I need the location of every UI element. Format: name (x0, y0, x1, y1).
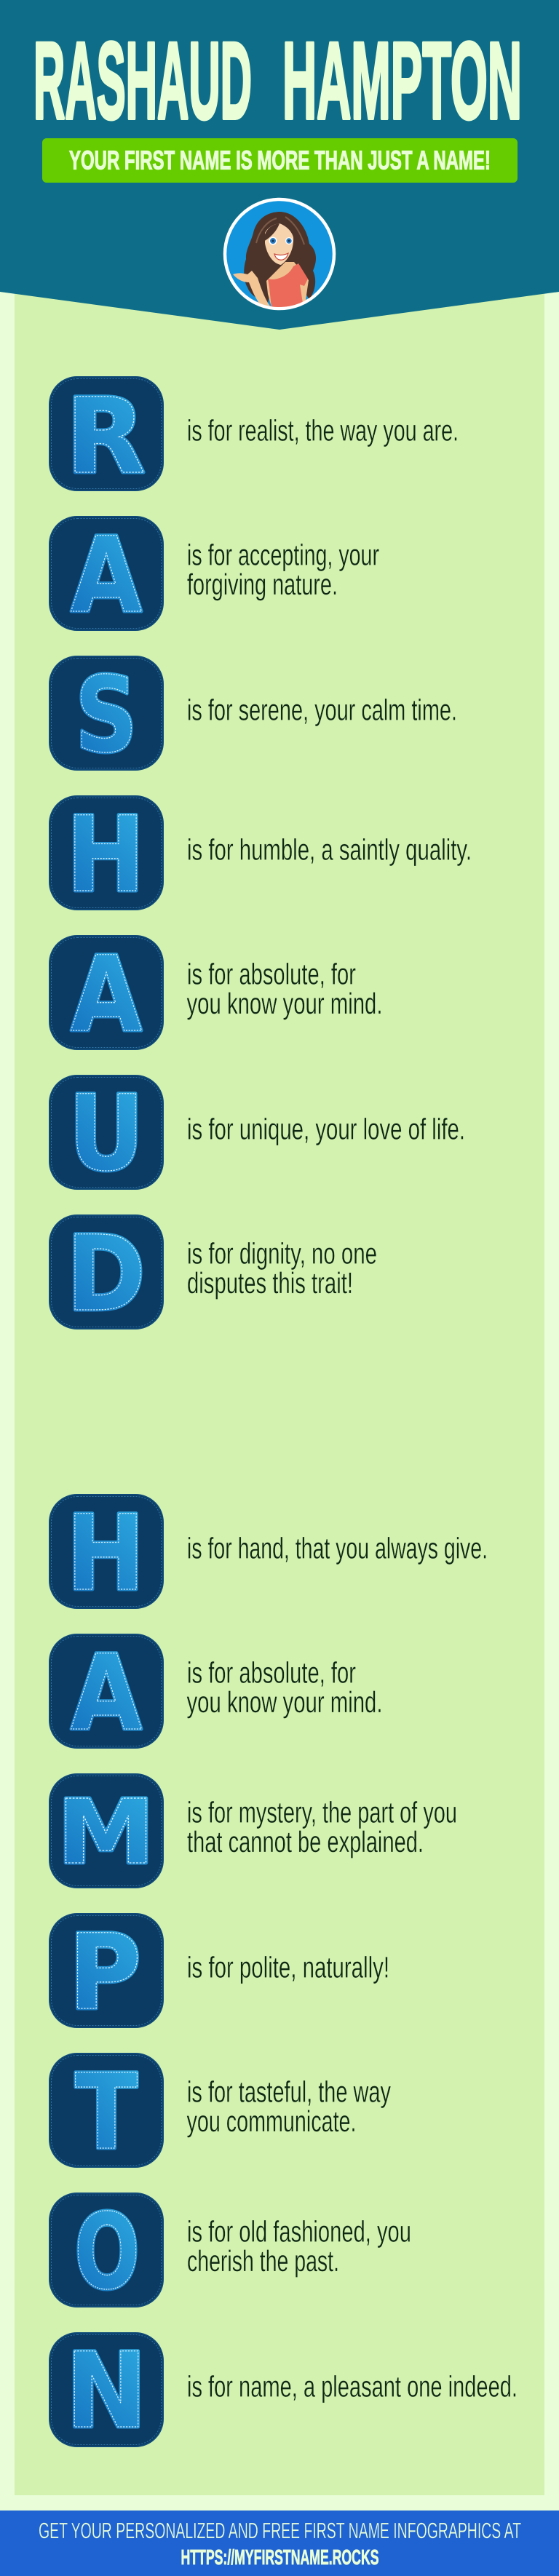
tile: letter N: N (66, 2330, 147, 2452)
text: A meaning (186, 1656, 383, 1719)
text: T meaning (186, 2075, 391, 2138)
text: M meaning: that cannot be explained. (187, 1825, 424, 1859)
tile: letter H: H (66, 1492, 145, 1614)
tile: letter A: A (71, 1632, 142, 1754)
text: D meaning: disputes this trait! (187, 1266, 353, 1300)
row: U (49, 1073, 465, 1194)
text: A meaning: is for absolute, for (187, 1656, 356, 1690)
tile: letter T: T (75, 2051, 138, 2173)
tile: letter U: U (68, 1073, 144, 1194)
text: O meaning: is for old fashioned, you (187, 2215, 411, 2249)
tile: letter H: H (66, 794, 145, 915)
row: R (49, 375, 459, 497)
text: T meaning: you communicate. (186, 2104, 357, 2138)
tile: letter A: A (71, 514, 142, 636)
tile: letter T (49, 2051, 163, 2173)
row: M (49, 1774, 457, 1888)
text: T meaning: is for tasteful, the way (187, 2075, 391, 2109)
text: A meaning (187, 538, 379, 601)
tile: letter P (49, 1912, 163, 2033)
tile: letter A: A (71, 514, 142, 636)
tile: letter P: P (68, 1912, 141, 2033)
tile: letter M: M (57, 1781, 155, 1884)
text: A meaning: is for absolute, for (187, 958, 356, 991)
footer URL: HTTPS://MYFIRSTNAME.ROCKS (181, 2546, 378, 2569)
row: A (49, 1632, 383, 1754)
tile: letter S (49, 654, 163, 776)
text: A meaning: forgiving nature. (187, 568, 338, 601)
text: D meaning: is for dignity, no one (187, 1237, 377, 1271)
text: A meaning: you know your mind. (186, 987, 383, 1020)
text: A meaning (186, 958, 383, 1020)
row: H (49, 1492, 488, 1614)
text: A meaning: you know your mind. (186, 1685, 383, 1719)
text: M meaning: is for mystery, the part of you (187, 1796, 457, 1829)
text: D meaning (187, 1237, 377, 1300)
text: O meaning: cherish the past. (187, 2244, 339, 2278)
tile: letter S: S (75, 654, 138, 776)
icon: woman avatar in circle (225, 199, 334, 310)
tile: letter D: D (66, 1213, 146, 1335)
row: A (49, 934, 383, 1055)
text: O meaning (187, 2215, 411, 2278)
tile: letter H: H (66, 1492, 145, 1614)
footer (0, 2511, 559, 2576)
tile: letter M: M (57, 1781, 155, 1884)
row: T (49, 2051, 391, 2173)
tile: letter S: S (75, 654, 138, 776)
row: O (49, 2191, 411, 2313)
tile: letter H: H (66, 794, 145, 915)
tile: letter O: O (74, 2191, 140, 2313)
row: P (49, 1912, 389, 2033)
tile: letter R: R (66, 375, 146, 497)
text: S meaning: is for serene, your calm time. (187, 693, 457, 726)
subtitle bar (42, 138, 518, 183)
row: N (49, 2330, 518, 2452)
tile: letter P: P (68, 1912, 141, 2033)
tile: letter N: N (66, 2330, 147, 2452)
tile: letter U: U (68, 1073, 144, 1194)
tile: letter T: T (75, 2051, 138, 2173)
header banner (0, 0, 559, 330)
tile: letter A: A (71, 934, 142, 1055)
tile: letter R: R (66, 375, 146, 497)
row: D (49, 1213, 377, 1335)
tile: letter D: D (66, 1213, 146, 1335)
row: S (49, 654, 457, 776)
text: A meaning: is for accepting, your (187, 538, 379, 572)
tile: letter O: O (74, 2191, 140, 2313)
text: M meaning (187, 1796, 457, 1859)
row: A (49, 514, 379, 636)
text: P meaning: is for polite, naturally! (187, 1950, 389, 1984)
row: H (49, 794, 472, 915)
tile: letter A: A (71, 1632, 142, 1754)
tile: letter A: A (71, 934, 142, 1055)
